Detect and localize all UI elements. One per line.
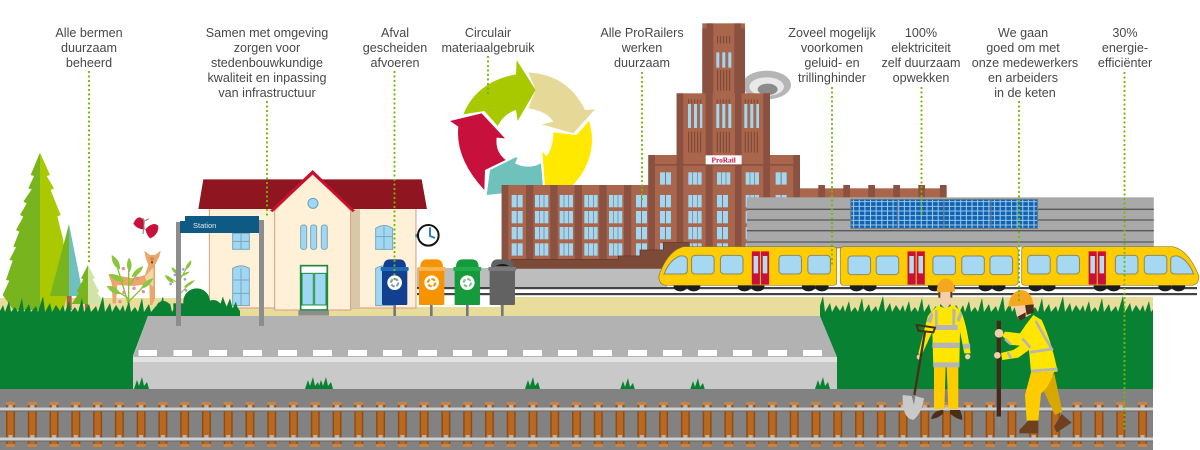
label: geluid: trillinghinder: [798, 71, 866, 85]
arrow: green: [463, 60, 536, 126]
gray wall behind bins and train: [417, 268, 667, 288]
back leg: [1043, 373, 1062, 415]
sand strip behind landscape: [0, 297, 1153, 317]
rails: [0, 408, 1153, 442]
dotted line: energie: [1123, 73, 1126, 430]
tower middle: [677, 93, 770, 157]
ProRail logo sign: ProRail: [711, 155, 736, 164]
reflective stripes: [927, 308, 970, 367]
label: medewerkers: onze medewerkers: [972, 56, 1078, 70]
label: ProRailers: duurzaam: [614, 56, 670, 70]
platform wall: [133, 362, 837, 390]
side windows: [233, 225, 393, 306]
label: bermen: beheerd: [66, 56, 112, 70]
label: energie: energie-: [1102, 41, 1148, 55]
yellow train: [659, 247, 1199, 291]
dotted line: ProRailers: [641, 73, 643, 202]
grass left: [0, 288, 240, 389]
label: ProRailers: Alle ProRailers: [600, 26, 684, 40]
label: elektriciteit: 100%: [905, 26, 937, 40]
icon: deer: [108, 251, 161, 305]
label: medewerkers: in de keten: [994, 86, 1056, 100]
round attic window: [308, 198, 318, 208]
icon: clock: [415, 225, 439, 246]
label: omgeving: Samen met omgeving: [206, 26, 328, 40]
label: elektriciteit: opwekken: [893, 71, 949, 85]
building walls: [209, 207, 416, 308]
dotted line: omgeving: [266, 102, 268, 218]
torso and arms: [918, 305, 971, 367]
label: omgeving: van infrastructuur: [218, 86, 316, 100]
roof: [198, 179, 427, 209]
label: afval: Afval: [381, 26, 409, 40]
label: geluid: Zoveel mogelijk: [788, 26, 876, 40]
platform edge: [133, 357, 837, 362]
wheels: [674, 282, 1185, 291]
tower top: [702, 23, 745, 97]
ProRail logo sign: [706, 155, 742, 164]
worker with pole: [994, 290, 1072, 434]
central gable: [275, 173, 351, 310]
railway track: [0, 389, 1153, 450]
hands: [995, 329, 1003, 338]
solar panels: [851, 199, 1038, 228]
shovel: [914, 332, 925, 395]
train doors: [752, 251, 1106, 285]
label: geluid: voorkomen: [801, 41, 863, 55]
platform surface: [133, 316, 837, 357]
icon: roof disc: [742, 71, 791, 99]
pole: [997, 321, 1001, 417]
head and helmet: [938, 292, 952, 308]
label: bermen: duurzaam: [61, 41, 117, 55]
left wing: [502, 185, 652, 268]
icon: teal tree: [50, 224, 83, 310]
icon: butterfly: [133, 217, 158, 238]
label: medewerkers: goed om met: [986, 41, 1060, 55]
label: afval: gescheiden: [363, 41, 427, 55]
recycling bins: [381, 259, 516, 323]
label: energie: 30%: [1112, 26, 1138, 40]
dotted line: afval: [393, 72, 396, 283]
front leg: [1025, 372, 1054, 421]
label: omgeving: stedenbouwkundige: [211, 56, 323, 70]
grass right: [820, 296, 1153, 390]
circular material arrows: [450, 60, 595, 195]
bin: green: [453, 259, 481, 323]
bushes: [156, 288, 239, 317]
arrow: red: [450, 113, 506, 190]
label: ProRailers: werken: [621, 41, 662, 55]
solar roof shed: [747, 197, 1154, 247]
grass tufts: [134, 377, 830, 390]
icon: large conifer tree: [3, 153, 67, 312]
icon: flowering plant: [107, 255, 153, 307]
bin: gray: [488, 259, 516, 323]
label: medewerkers: en arbeiders: [988, 71, 1058, 85]
ProRail headquarters: [502, 23, 947, 268]
worker with shovel: [903, 278, 971, 420]
train windows: [664, 255, 1194, 275]
dotted line: bermen: [88, 72, 90, 263]
train rails: [417, 287, 1197, 296]
legs and boots: [934, 366, 958, 409]
label: circulair: materiaalgebruik: [441, 41, 535, 55]
label: circulair: Circulair: [465, 26, 511, 40]
label: elektriciteit: zelf duurzaam: [881, 56, 961, 70]
reflective stripes: [1005, 321, 1058, 371]
station sign: [176, 216, 264, 326]
dotted line: medewerkers: [1018, 102, 1020, 303]
platform white dashes: [138, 350, 822, 356]
central slit windows: [301, 225, 327, 249]
hands: [917, 354, 922, 360]
arrow: teal: [487, 158, 543, 195]
label: afval: afvoeren: [370, 56, 420, 70]
main block: [648, 155, 800, 268]
icon: second plant: [165, 260, 195, 298]
entrance steps: [512, 243, 689, 268]
station sign: Station: [193, 221, 216, 230]
bin: orange: [418, 259, 446, 323]
carriages: [659, 247, 1199, 285]
label: energie: efficiënter: [1098, 56, 1152, 70]
icon: small pale tree: [72, 265, 105, 311]
dotted line: circulair: [487, 57, 489, 94]
platform: [133, 316, 837, 390]
torso and arms: [1001, 315, 1058, 372]
label: medewerkers: We gaan: [998, 26, 1048, 40]
label: omgeving: zorgen voor: [234, 41, 300, 55]
side shadow: [351, 209, 360, 308]
front door: [298, 266, 329, 316]
label: elektriciteit: elektriciteit: [891, 41, 951, 55]
label: bermen: Alle bermen: [55, 26, 123, 40]
label: omgeving: kwaliteit en inpassing: [207, 71, 327, 85]
arrow: yellow: [542, 121, 592, 188]
right low wing: [793, 185, 947, 248]
dotted line: geluid: [831, 88, 833, 264]
head, beard and helmet: [1014, 306, 1031, 321]
arrow: beige: [528, 72, 595, 133]
label: geluid: geluid- en: [804, 56, 860, 70]
dotted line: elektriciteit: [920, 88, 923, 215]
station building: [198, 170, 427, 316]
bin: blue: [381, 259, 409, 323]
